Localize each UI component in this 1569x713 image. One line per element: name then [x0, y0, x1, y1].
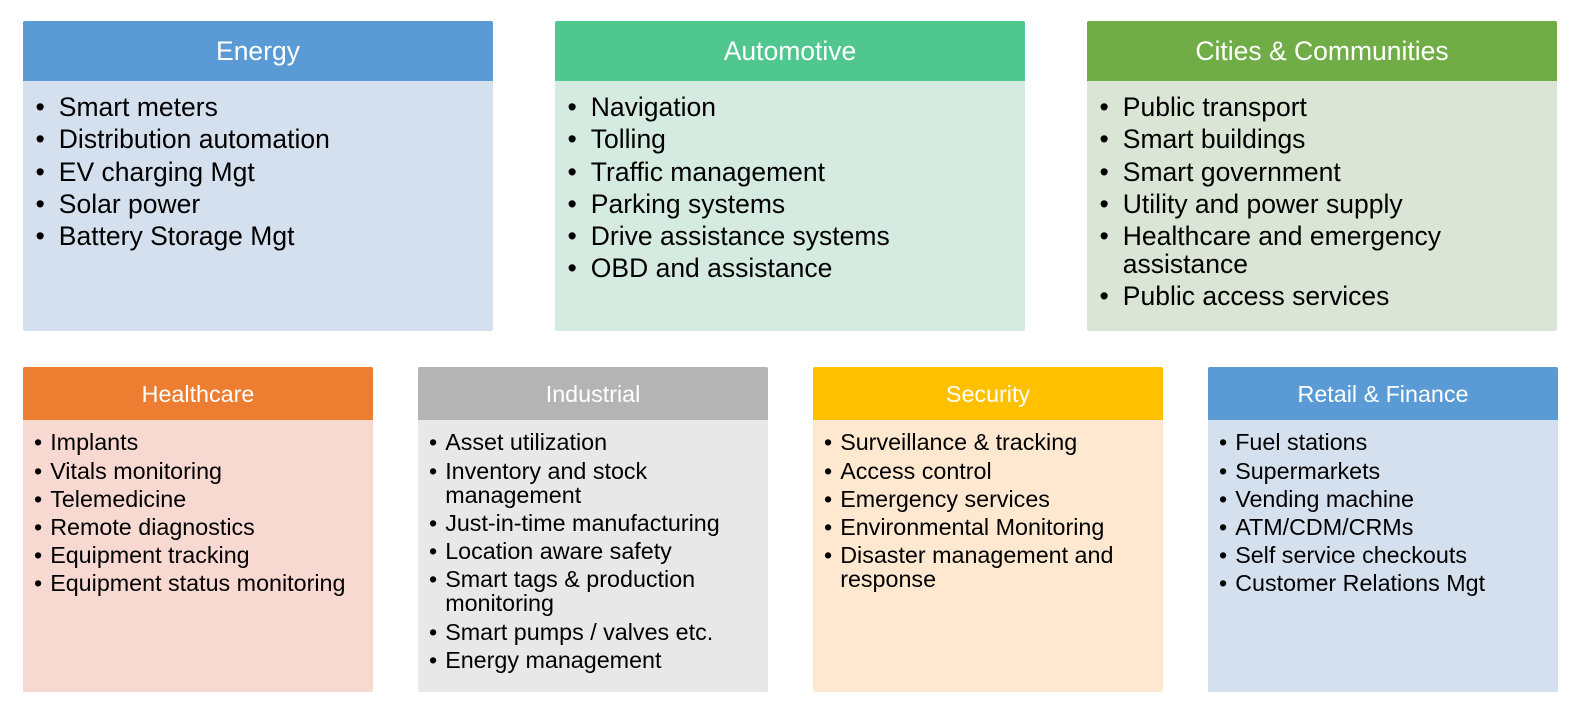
list: Automotive items: OBD and assistance: [591, 253, 832, 283]
list: Industrial items: •: [429, 619, 437, 645]
list: Industrial items: •: [429, 510, 437, 536]
list: Cities & Communities items: •: [1100, 124, 1109, 154]
list: Energy items: Smart meters: [59, 92, 218, 122]
list: Industrial items: •: [429, 538, 437, 564]
list: Security items: Disaster management and: [840, 542, 1113, 568]
list: Healthcare items: Equipment tracking: [50, 542, 250, 568]
list: Cities & Communities items: Public access services: [1123, 281, 1389, 311]
list: Cities & Communities items: •: [1100, 189, 1109, 219]
list: Industrial items: •: [429, 647, 437, 673]
list: Automotive items: •: [568, 92, 577, 122]
list: Industrial items: •: [429, 458, 437, 484]
panel: Industrial: [418, 367, 768, 692]
list: Automotive items: [568, 92, 890, 283]
list: Cities & Communities items: assistance: [1123, 249, 1248, 279]
list: Retail & Finance items: [1219, 429, 1485, 596]
list: Industrial items: •: [429, 429, 437, 455]
heading: Retail & Finance: [1208, 367, 1558, 420]
list: Healthcare items: Implants: [50, 429, 138, 455]
list: Automotive items: Tolling: [591, 124, 666, 154]
list: Cities & Communities items: •: [1100, 92, 1109, 122]
list: Security items: Emergency services: [840, 486, 1050, 512]
list: Retail & Finance items: •: [1219, 570, 1227, 596]
list: Retail & Finance items: •: [1219, 486, 1227, 512]
list: Automotive items: •: [568, 221, 577, 251]
list: Automotive items: Navigation: [591, 92, 716, 122]
heading: Energy: Energy: [216, 36, 300, 66]
list: Healthcare items: Vitals monitoring: [50, 458, 222, 484]
list: Automotive items: Drive assistance systems: [591, 221, 890, 251]
list: Automotive items: •: [568, 189, 577, 219]
list: Cities & Communities items: Smart buildings: [1123, 124, 1305, 154]
list: Energy items: •: [36, 157, 45, 187]
heading: Cities & Communities: [1087, 21, 1557, 81]
list: Security items: •: [824, 458, 832, 484]
list: Retail & Finance items: Fuel stations: [1235, 429, 1367, 455]
list: Cities & Communities items: Healthcare and emergency: [1123, 221, 1441, 251]
list: Security items: •: [824, 542, 832, 568]
list: Automotive items: Traffic management: [591, 157, 825, 187]
list: Industrial items: monitoring: [445, 590, 554, 616]
list: Energy items: [36, 92, 330, 251]
list: Healthcare items: Telemedicine: [50, 486, 186, 512]
list: Healthcare items: Equipment status monitoring: [50, 570, 345, 596]
list: Security items: [824, 429, 1113, 592]
list: Healthcare items: •: [34, 570, 42, 596]
list: Cities & Communities items: •: [1100, 157, 1109, 187]
list: Industrial items: [429, 429, 720, 673]
list: Security items: Access control: [840, 458, 992, 484]
list: Healthcare items: •: [34, 486, 42, 512]
list: Retail & Finance items: Vending machine: [1235, 486, 1414, 512]
list: Retail & Finance items: ATM/CDM/CRMs: [1235, 514, 1413, 540]
list: Energy items: Solar power: [59, 189, 200, 219]
list: Industrial items: Inventory and stock: [445, 458, 647, 484]
list: Retail & Finance items: •: [1219, 429, 1227, 455]
panel: Automotive: [555, 21, 1025, 331]
list: Security items: response: [840, 566, 936, 592]
list: Automotive items: •: [568, 124, 577, 154]
list: Security items: •: [824, 486, 832, 512]
list: Healthcare items: •: [34, 542, 42, 568]
list: Energy items: Battery Storage Mgt: [59, 221, 294, 251]
list: Energy items: Distribution automation: [59, 124, 330, 154]
list: Energy items: EV charging Mgt: [59, 157, 255, 187]
list: Automotive items: •: [568, 253, 577, 283]
list: Security items: •: [824, 429, 832, 455]
list: Energy items: •: [36, 221, 45, 251]
list: Automotive items: Parking systems: [591, 189, 785, 219]
list: Cities & Communities items: •: [1100, 281, 1109, 311]
list: Retail & Finance items: •: [1219, 514, 1227, 540]
list: Healthcare items: [34, 429, 345, 596]
list: Retail & Finance items: Customer Relations Mgt: [1235, 570, 1485, 596]
list: Industrial items: Smart tags & production: [445, 566, 695, 592]
list: Healthcare items: Remote diagnostics: [50, 514, 255, 540]
panel: Retail & Finance: [1208, 367, 1558, 692]
list: Industrial items: Asset utilization: [445, 429, 607, 455]
list: Retail & Finance items: Self service checkouts: [1235, 542, 1467, 568]
heading: Industrial: [418, 367, 768, 420]
heading: Automotive: [555, 21, 1025, 81]
list: Retail & Finance items: •: [1219, 542, 1227, 568]
panel: Security: [813, 367, 1163, 692]
list: Energy items: •: [36, 189, 45, 219]
heading: Industrial: Industrial: [546, 381, 640, 407]
list: Industrial items: management: [445, 482, 581, 508]
list: Retail & Finance items: Supermarkets: [1235, 458, 1380, 484]
list: Industrial items: Smart pumps / valves etc.: [445, 619, 713, 645]
list: Security items: Environmental Monitoring: [840, 514, 1104, 540]
list: Security items: •: [824, 514, 832, 540]
list: Cities & Communities items: Public transport: [1123, 92, 1307, 122]
list: Retail & Finance items: •: [1219, 458, 1227, 484]
list: Security items: Surveillance & tracking: [840, 429, 1077, 455]
panel: Energy: [23, 21, 493, 331]
heading: Retail & Finance: Retail & Finance: [1298, 381, 1468, 407]
list: Energy items: •: [36, 92, 45, 122]
list: Energy items: •: [36, 124, 45, 154]
list: Automotive items: •: [568, 157, 577, 187]
list: Cities & Communities items: Smart government: [1123, 157, 1341, 187]
heading: Security: [813, 367, 1163, 420]
panel: Cities & Communities: [1087, 21, 1557, 331]
heading: Healthcare: [23, 367, 373, 420]
panel: Healthcare: [23, 367, 373, 692]
list: Cities & Communities items: [1100, 92, 1441, 311]
list: Cities & Communities items: Utility and power supply: [1123, 189, 1403, 219]
heading: Cities & Communities: Cities & Communities: [1195, 36, 1449, 66]
heading: Security: Security: [946, 381, 1030, 407]
list: Healthcare items: •: [34, 514, 42, 540]
heading: Energy: [23, 21, 493, 81]
list: Cities & Communities items: •: [1100, 221, 1109, 251]
list: Industrial items: Just-in-time manufacturing: [445, 510, 720, 536]
heading: Automotive: Automotive: [724, 36, 856, 66]
list: Industrial items: •: [429, 566, 437, 592]
list: Industrial items: Energy management: [445, 647, 661, 673]
list: Healthcare items: •: [34, 458, 42, 484]
heading: Healthcare: Healthcare: [142, 381, 254, 407]
list: Industrial items: Location aware safety: [445, 538, 672, 564]
list: Healthcare items: •: [34, 429, 42, 455]
